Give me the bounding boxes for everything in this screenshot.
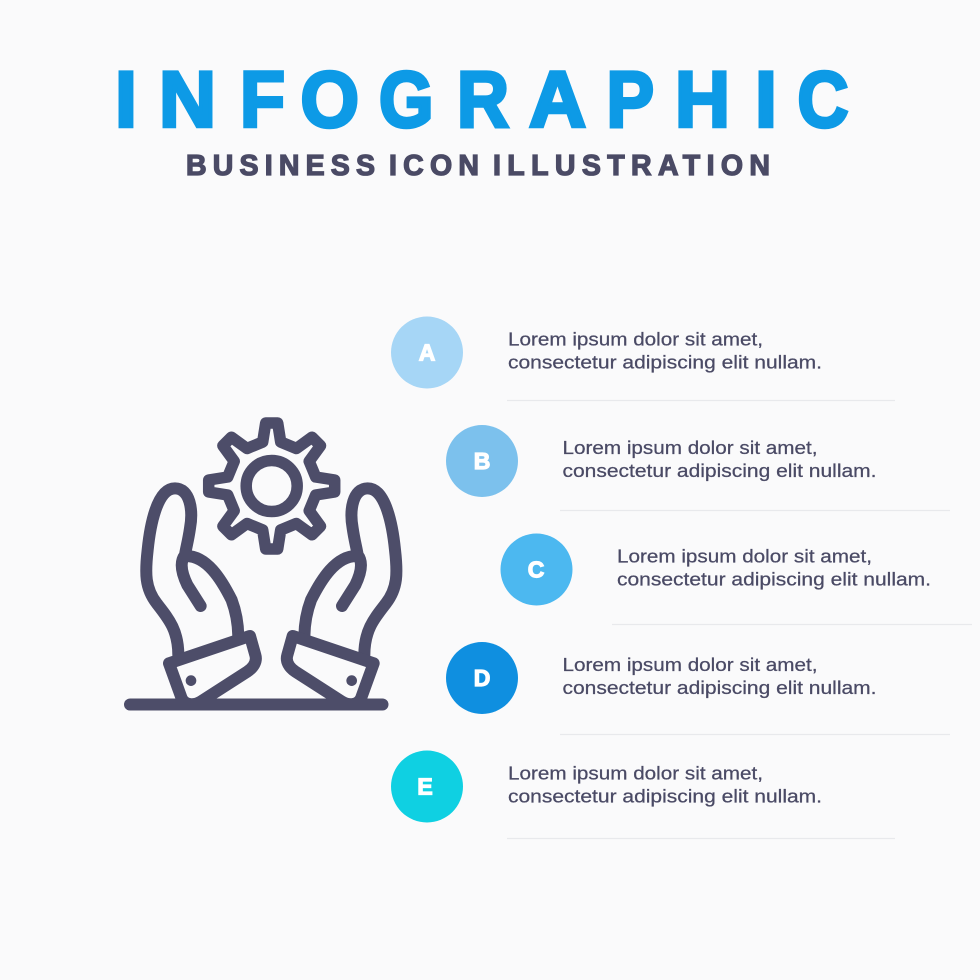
icon: right hand <box>287 488 396 704</box>
text E: Lorem ipsum dolor sit amet, <box>508 762 763 784</box>
badge D <box>446 642 518 714</box>
title: R <box>457 54 509 144</box>
title: A <box>529 54 586 144</box>
icon: gear <box>209 423 335 549</box>
title: O <box>300 54 359 144</box>
text E: consectetur adipiscing elit nullam. <box>508 786 822 806</box>
badge D: D <box>474 665 490 691</box>
item C <box>500 534 931 606</box>
title: N <box>159 54 216 144</box>
icon: base line <box>130 698 382 710</box>
text D: Lorem ipsum dolor sit amet, <box>562 654 818 675</box>
badge E <box>391 750 463 822</box>
text D: consectetur adipiscing elit nullam. <box>562 677 876 698</box>
item D <box>446 642 876 714</box>
badge B <box>446 425 518 497</box>
subtitle: ICON <box>389 150 479 182</box>
text B: Lorem ipsum dolor sit amet, <box>562 437 818 458</box>
title: C <box>798 54 848 144</box>
title: H <box>675 54 730 144</box>
title: P <box>606 54 654 144</box>
text A: consectetur adipiscing elit nullam. <box>508 352 822 372</box>
title: I <box>755 54 777 144</box>
text C: consectetur adipiscing elit nullam. <box>617 568 931 590</box>
title: I <box>115 54 137 144</box>
subtitle: BUSINESS <box>186 150 375 182</box>
badge C <box>500 534 572 606</box>
text B: consectetur adipiscing elit nullam. <box>562 460 876 481</box>
text A: Lorem ipsum dolor sit amet, <box>508 328 763 350</box>
icon: hands holding gear <box>130 423 396 704</box>
badge C: C <box>528 556 544 582</box>
badge E: E <box>417 774 433 800</box>
badge A <box>391 316 463 388</box>
title: F <box>240 54 285 144</box>
title: G <box>379 54 434 144</box>
icon: left hand <box>146 488 256 704</box>
subtitle: ILLUSTRATION <box>493 150 770 182</box>
item B <box>446 425 876 497</box>
item A <box>391 316 822 388</box>
item E <box>391 750 822 822</box>
badge B: B <box>474 448 490 474</box>
badge A: A <box>419 340 435 366</box>
text C: Lorem ipsum dolor sit amet, <box>617 546 872 566</box>
